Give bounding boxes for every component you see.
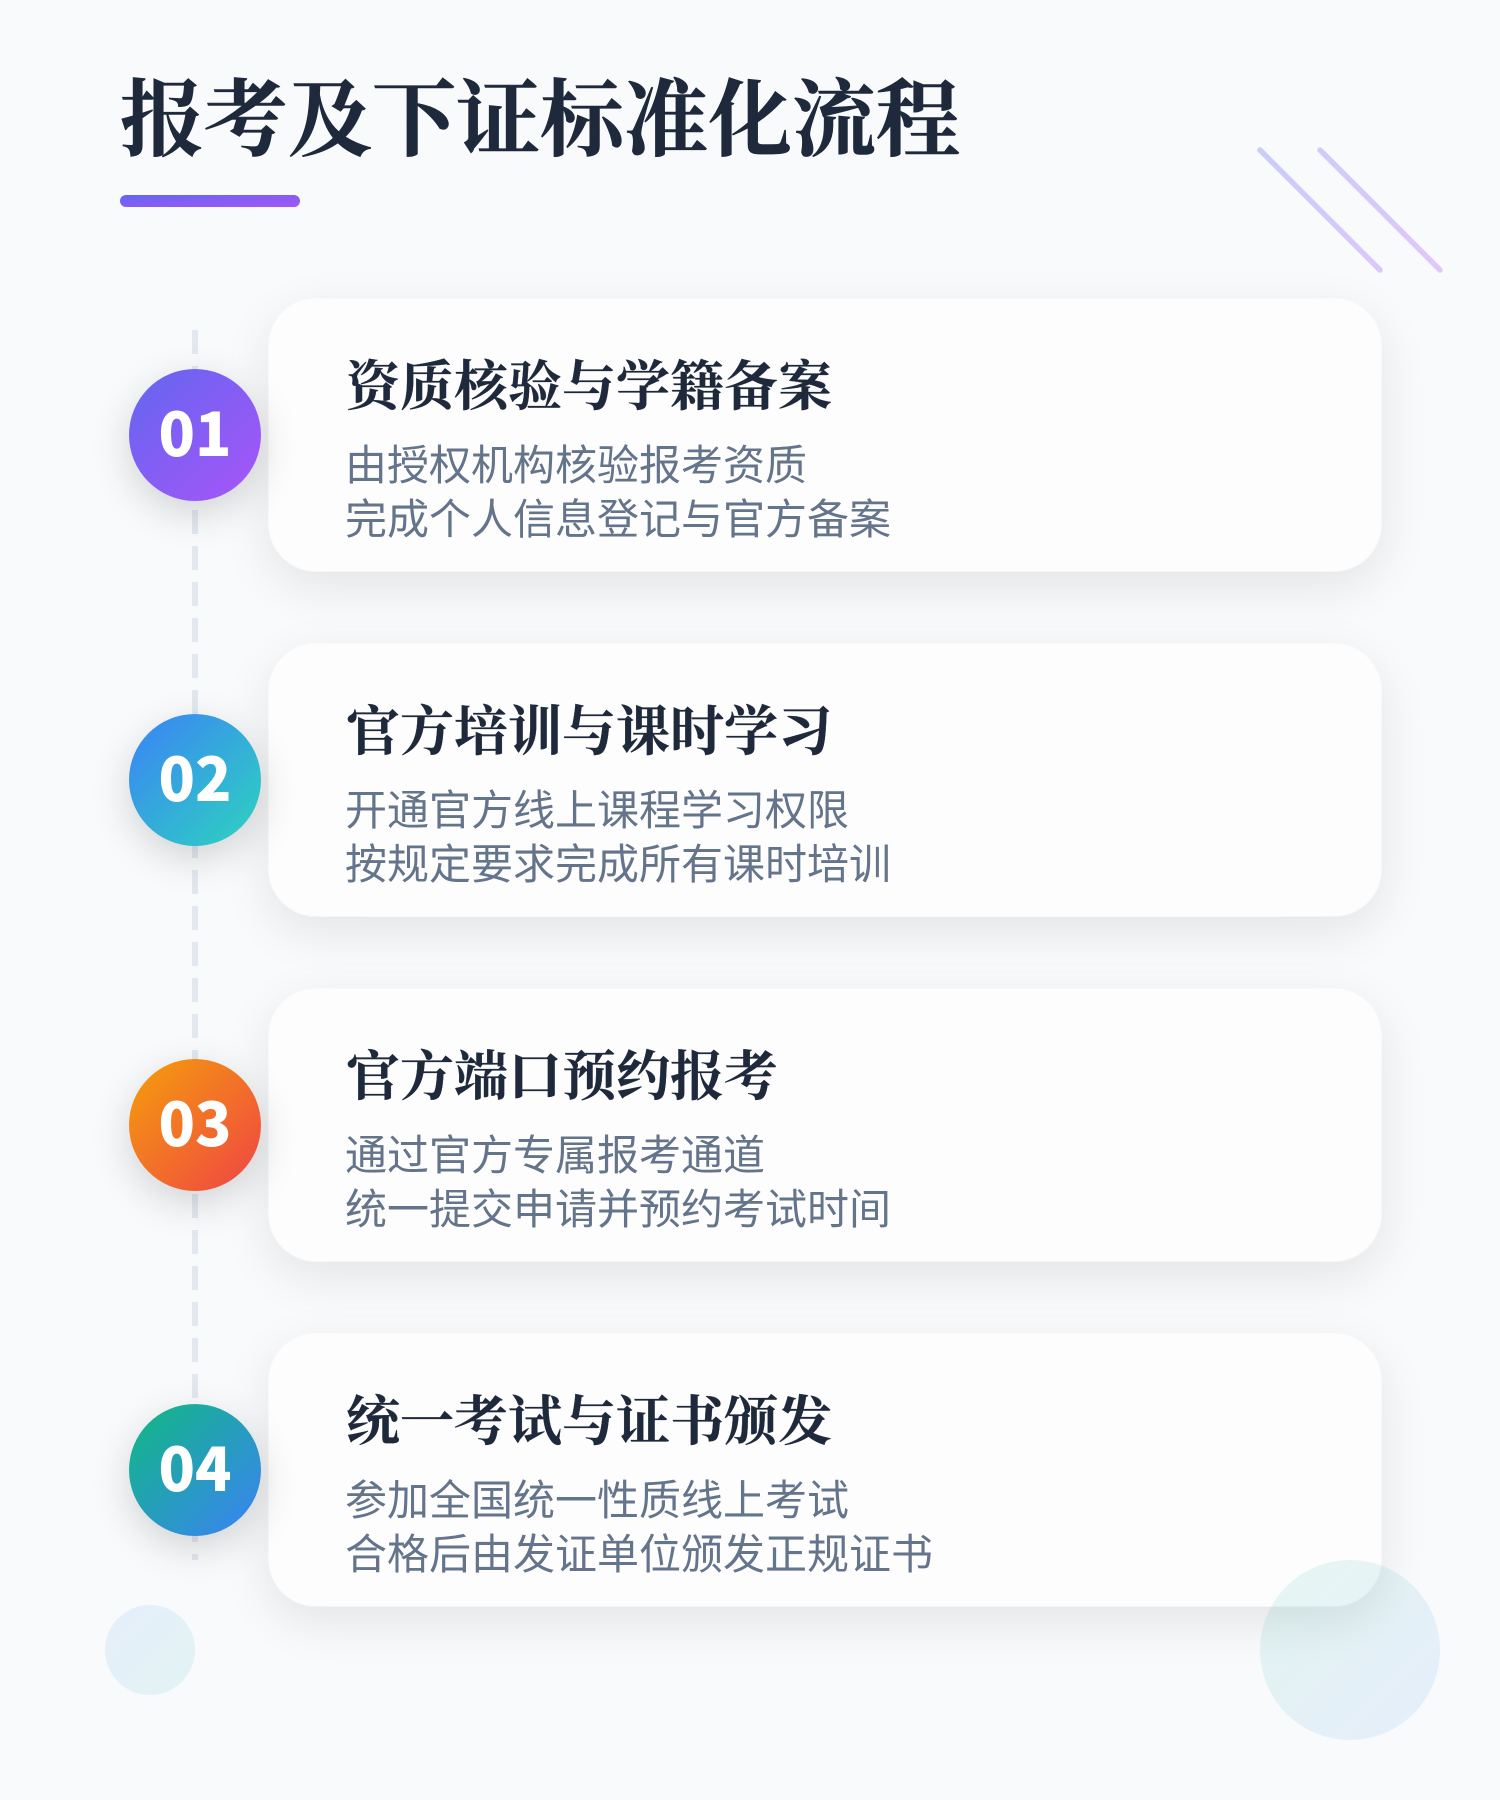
step 2 description: 按规定要求完成所有课时培训 (345, 841, 891, 888)
step 4 heading: 统一考试与证书颁发 (346, 1392, 832, 1452)
step 3 description: 统一提交申请并预约考试时间 (345, 1186, 891, 1233)
title: 报考及下证标准化流程 (120, 75, 960, 168)
step 4 description (345, 1477, 933, 1578)
panel: step 3 card (268, 988, 1382, 1262)
step 4 description: 参加全国统一性质线上考试 (345, 1477, 849, 1524)
step 3 number badge: 03 (158, 1077, 232, 1164)
step 2 number badge (129, 714, 261, 846)
step 1 description: 由授权机构核验报考资质 (345, 442, 807, 489)
step 3 number badge (129, 1059, 261, 1191)
step 2 description (345, 787, 891, 888)
step 1 description: 完成个人信息登记与官方备案 (345, 496, 891, 543)
step 2 heading: 官方培训与课时学习 (346, 702, 832, 762)
step 3 description (345, 1132, 891, 1233)
step 2 description: 开通官方线上课程学习权限 (345, 787, 849, 834)
timeline dashed line (192, 330, 198, 1560)
step 1 number badge: 01 (158, 387, 232, 474)
step 4 number badge: 04 (158, 1422, 232, 1509)
decorative large circle (1260, 1560, 1440, 1740)
step 1 number badge (129, 369, 261, 501)
panel: step 2 card (268, 643, 1382, 917)
step 2 number badge: 02 (158, 732, 232, 819)
step 4 number badge (129, 1404, 261, 1536)
step 3 heading: 官方端口预约报考 (346, 1047, 778, 1107)
panel: step 4 card (268, 1333, 1382, 1607)
step 4 description: 合格后由发证单位颁发正规证书 (345, 1531, 933, 1578)
panel: step 1 card (268, 298, 1382, 572)
decorative small circle (105, 1605, 195, 1695)
step 1 description (345, 442, 891, 543)
decorative diagonal lines (1257, 147, 1443, 273)
step 3 description: 通过官方专属报考通道 (345, 1132, 765, 1179)
step 1 heading: 资质核验与学籍备案 (346, 357, 832, 417)
title underline (120, 195, 300, 207)
